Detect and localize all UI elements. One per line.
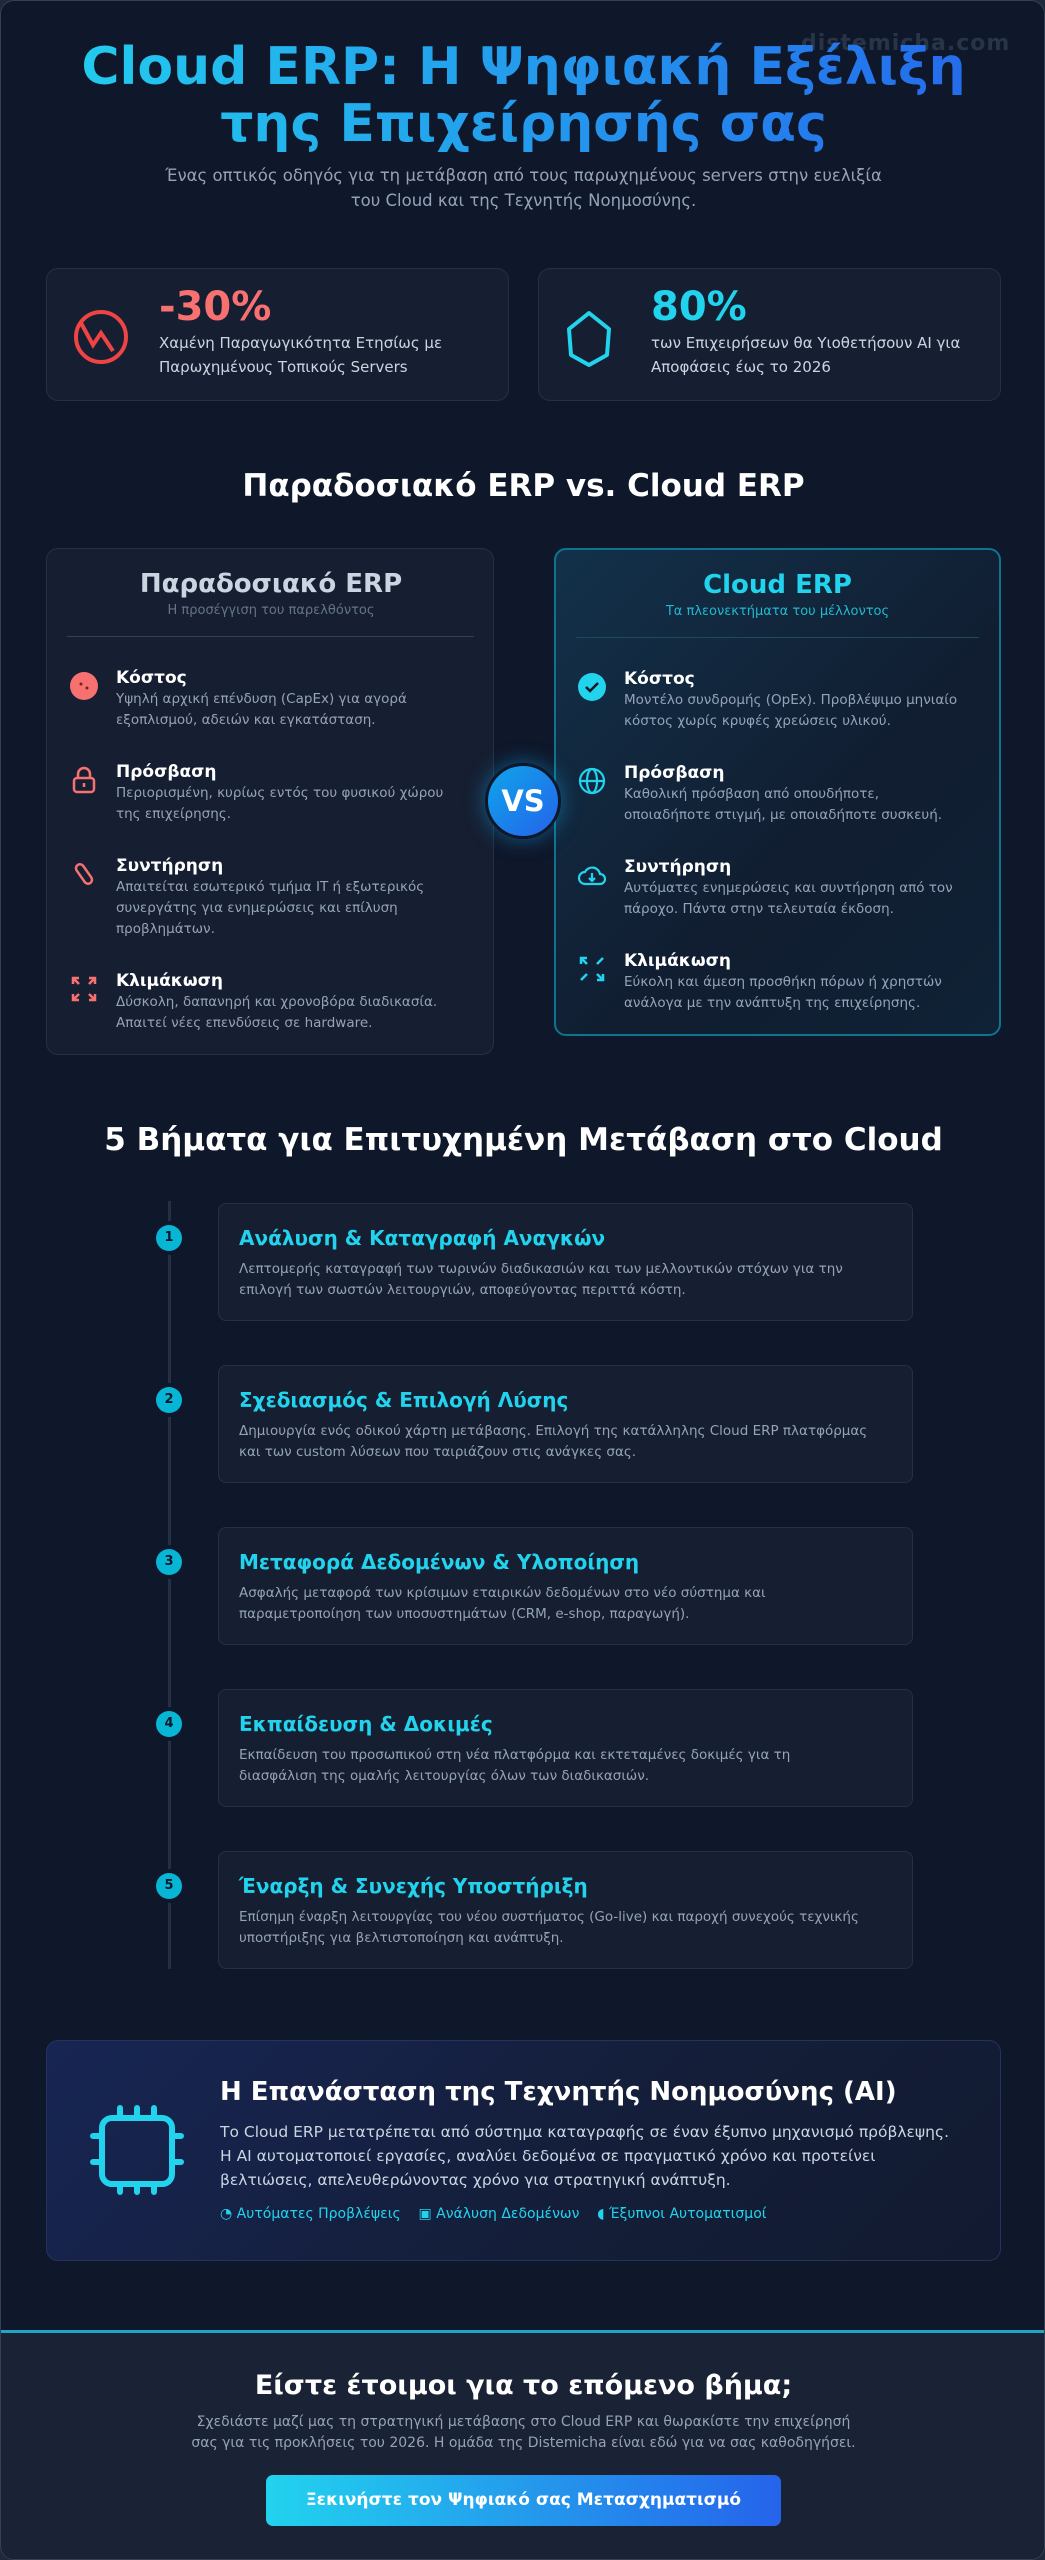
stat text: των Επιχειρήσεων θα Υιοθετήσουν AI για: [651, 334, 960, 352]
item: cost: Κόστος: [624, 669, 695, 689]
item: maintenance: Συντήρηση: [624, 857, 731, 877]
item: maintenance: [116, 856, 424, 937]
step 4: διασφάλιση της ομαλής λειτουργίας όλων των διαδικασιών.: [239, 1768, 649, 1784]
item: access: οποιαδήποτε στιγμή, με οποιαδήποτε συσκευή.: [624, 807, 942, 823]
step 5: Επίσημη έναρξη λειτουργίας του νέου συστήματος (Go-live) και παροχή συνεχούς τεχνικής: [239, 1909, 859, 1925]
VS badge: VS: [501, 784, 545, 818]
panel: AI: [46, 2040, 1001, 2261]
title: της Επιχείρησής σας: [220, 94, 827, 154]
panel: traditional ERP: Παραδοσιακό ERP: [140, 569, 402, 599]
step 2: Δημιουργία ενός οδικού χάρτη μετάβασης. Επιλογή της κατάλληλης Cloud ERP πλατφόρμας: [239, 1423, 867, 1439]
step 3: Ασφαλής μεταφορά των κρίσιμων εταιρικών δεδομένων στο νέο σύστημα και: [239, 1585, 766, 1601]
stat text: Παρωχημένους Τοπικούς Servers: [159, 358, 408, 376]
AI tags: ◔ Αυτόματες Προβλέψεις ▣ Ανάλυση Δεδομένων ◖ Έξυπνοι Αυτοματισμοί: [220, 2206, 766, 2222]
icon: chip: [90, 2105, 184, 2195]
item: access: [624, 763, 942, 823]
item: maintenance: Απαιτείται εσωτερικό τμήμα IT ή εξωτερικός: [116, 879, 424, 895]
heading: steps: 5 Βήματα για Επιτυχημένη Μετάβαση στο Cloud: [104, 1122, 943, 1158]
step 1: [218, 1203, 913, 1321]
item: cost: εξοπλισμού, αδειών και εγκατάσταση.: [116, 712, 376, 728]
step 5: [218, 1851, 913, 1969]
item: maintenance: Αυτόματες ενημερώσεις και συντήρηση από τον: [624, 880, 953, 896]
step 4: Εκπαίδευση του προσωπικού στη νέα πλατφόρμα και εκτεταμένες δοκιμές για τη: [239, 1747, 790, 1763]
stat text: Αποφάσεις έως το 2026: [651, 358, 831, 376]
item: access: [116, 762, 443, 822]
stat text: [159, 284, 442, 376]
watermark: distemicha.com: [801, 31, 1010, 56]
step 2 number: [156, 1387, 182, 1413]
icon: expand: [580, 956, 604, 982]
step 4 number: 4: [164, 1716, 174, 1731]
step 3 number: 3: [164, 1554, 174, 1569]
item: maintenance: πάροχο. Πάντα στην τελευταία έκδοση.: [624, 901, 894, 917]
stat card: -30%: [46, 268, 509, 401]
item: access: Περιορισμένη, κυρίως εντός του φυσικού χώρου: [116, 785, 443, 801]
step 5 number: [156, 1873, 182, 1899]
item: access: Καθολική πρόσβαση από οπουδήποτε,: [624, 786, 879, 802]
subtitle: [165, 166, 882, 210]
step 2: [218, 1365, 913, 1483]
CTA text: [191, 2414, 856, 2451]
step 2 number: 2: [164, 1392, 174, 1407]
item: maintenance: Συντήρηση: [116, 856, 223, 876]
step 1 number: [156, 1225, 182, 1251]
item: cost: κόστος χωρίς κρυφές χρεώσεις υλικού.: [624, 713, 891, 729]
CTA heading: Είστε έτοιμοι για το επόμενο βήμα;: [255, 2370, 792, 2401]
title: [1, 39, 1045, 153]
panel: traditional ERP: [46, 548, 494, 1055]
item: cost: Μοντέλο συνδρομής (OpEx). Προβλέψιμο μηνιαίο: [624, 692, 957, 708]
CTA text: Σχεδιάστε μαζί μας τη στρατηγική μετάβασης στο Cloud ERP και θωρακίστε την επιχείρησή: [197, 2414, 850, 2430]
AI title: Η Επανάσταση της Τεχνητής Νοημοσύνης (AI): [220, 2077, 897, 2107]
panel: cloud ERP: [554, 548, 1001, 1036]
step 3: Μεταφορά Δεδομένων & Υλοποίηση: [239, 1550, 639, 1574]
heading: comparison: Παραδοσιακό ERP vs. Cloud ERP: [242, 468, 805, 504]
item: cost: Υψηλή αρχική επένδυση (CapEx) για αγορά: [116, 691, 407, 707]
step 3 number: [156, 1549, 182, 1575]
step 3: [218, 1527, 913, 1645]
AI body: [220, 2123, 949, 2189]
CTA button: Ξεκινήστε τον Ψηφιακό σας Μετασχηματισμό: [306, 2490, 741, 2510]
item: access: Πρόσβαση: [624, 763, 725, 783]
stat text: [651, 284, 960, 376]
VS badge: [485, 763, 561, 839]
item: scaling: Απαιτεί νέες επενδύσεις σε hardware.: [116, 1015, 372, 1031]
stat card: 80%: [538, 268, 1001, 401]
item: scaling: Κλιμάκωση: [116, 971, 223, 991]
stat text: 80%: [651, 284, 747, 330]
item: scaling: Δύσκολη, δαπανηρή και χρονοβόρα διαδικασία.: [116, 994, 437, 1010]
step 3: παραμετροποίηση των υποσυστημάτων (CRM, e-shop, παραγωγή).: [239, 1606, 689, 1622]
item: scaling: ανάλογα με την ανάπτυξη της επιχείρησης.: [624, 995, 920, 1011]
step 2: Σχεδιασμός & Επιλογή Λύσης: [239, 1388, 568, 1412]
item: scaling: [624, 951, 942, 1011]
CTA button: [266, 2475, 781, 2526]
item: maintenance: συνεργάτης για ενημερώσεις και επίλυση: [116, 900, 398, 916]
item: access: Πρόσβαση: [116, 762, 217, 782]
item: cost: [116, 668, 407, 728]
icon: cloud download: [578, 866, 606, 886]
item: cost: Κόστος: [116, 668, 187, 688]
icon: globe: [578, 768, 606, 794]
stat text: -30%: [159, 284, 271, 330]
item: scaling: Εύκολη και άμεση προσθήκη πόρων ή χρηστών: [624, 974, 942, 990]
icon: sad: [70, 672, 98, 700]
icon: hexagon: [567, 311, 611, 367]
step 4 number: [156, 1711, 182, 1737]
icon: tool: [74, 863, 94, 885]
item: maintenance: [624, 857, 953, 917]
step 1 number: 1: [164, 1230, 174, 1245]
step 1: επιλογή των σωστών λειτουργιών, αποφεύγοντας περιττά κόστη.: [239, 1282, 686, 1298]
CTA text: σας για τις προκλήσεις του 2026. Η ομάδα της Distemicha είναι εδώ για να σας καθοδηγήσει.: [191, 2435, 856, 2451]
icon: expand: [72, 976, 96, 1002]
icon: lock: [72, 766, 96, 794]
title: Cloud ERP: Η Ψηφιακή Εξέλιξη: [81, 37, 966, 97]
footer CTA: [1, 2330, 1045, 2560]
step 2: και των custom λύσεων που ταιριάζουν στις ανάγκες σας.: [239, 1444, 636, 1460]
step 5 number: 5: [164, 1878, 174, 1893]
step 1: Ανάλυση & Καταγραφή Αναγκών: [239, 1226, 605, 1250]
icon: check: [578, 673, 606, 701]
subtitle: του Cloud και της Τεχνητής Νοημοσύνης.: [351, 191, 696, 210]
item: access: της επιχείρησης.: [116, 806, 231, 822]
panel: traditional ERP: Η προσέγγιση του παρελθόντος: [168, 603, 374, 618]
step 4: Εκπαίδευση & Δοκιμές: [239, 1712, 493, 1736]
step 4: [218, 1689, 913, 1807]
subtitle: Ένας οπτικός οδηγός για τη μετάβαση από τους παρωχημένους servers στην ευελιξία: [165, 166, 882, 185]
panel: cloud ERP: Cloud ERP: [703, 570, 852, 600]
icon: declining circle: [74, 310, 128, 364]
AI body: Το Cloud ERP μετατρέπεται από σύστημα καταγραφής σε έναν έξυπνο μηχανισμό πρόβλεψης.: [220, 2123, 949, 2141]
AI body: βελτιώσεις, απελευθερώνοντας χρόνο για στρατηγική ανάπτυξη.: [220, 2171, 731, 2189]
item: cost: [624, 669, 957, 729]
item: scaling: Κλιμάκωση: [624, 951, 731, 971]
step 5: Έναρξη & Συνεχής Υποστήριξη: [239, 1874, 588, 1898]
step 5: υποστήριξης για βελτιστοποίηση και ανάπτυξη.: [239, 1930, 564, 1946]
stat text: Χαμένη Παραγωγικότητα Ετησίως με: [159, 334, 442, 352]
item: scaling: [116, 971, 437, 1031]
timeline line: [168, 1201, 171, 1969]
step 1: Λεπτομερής καταγραφή των τωρινών διαδικασιών και των μελλοντικών στόχων για την: [239, 1261, 843, 1277]
item: maintenance: προβλημάτων.: [116, 921, 215, 937]
panel: cloud ERP: Τα πλεονεκτήματα του μέλλοντος: [666, 604, 889, 619]
AI body: Η AI αυτοματοποιεί εργασίες, αναλύει δεδομένα σε πραγματικό χρόνο και προτείνει: [220, 2147, 876, 2165]
